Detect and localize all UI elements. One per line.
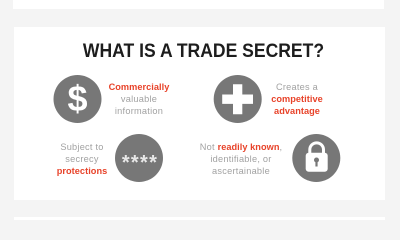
text: readily known	[200, 142, 282, 176]
text: secrecy: secrecy	[65, 154, 99, 164]
text: commercially: Commercially	[109, 82, 169, 92]
text: competitive	[271, 82, 323, 116]
text: competitive: advantage	[274, 106, 320, 116]
panel: bottom strip	[14, 217, 385, 220]
text: readily known: identifiable, or	[210, 154, 272, 164]
text: secrecy	[57, 142, 107, 176]
text: commercially: valuable	[121, 94, 157, 104]
icon: dollar: $	[67, 78, 88, 119]
text: commercially: information	[115, 106, 163, 116]
text: competitive: competitive	[271, 94, 323, 104]
text: readily known: ascertainable	[212, 166, 270, 176]
title: WHAT IS A TRADE SECRET?	[83, 40, 324, 62]
panel: top strip	[13, 0, 384, 8]
text: secrecy: Subject to	[60, 142, 104, 152]
text: competitive: Creates a	[276, 82, 318, 92]
icon: asterisks: ****	[122, 152, 158, 174]
text: readily known: Not readily known,	[200, 142, 282, 152]
panel: main	[14, 27, 385, 200]
text: secrecy: protections	[57, 166, 107, 176]
text: commercially	[109, 82, 170, 116]
